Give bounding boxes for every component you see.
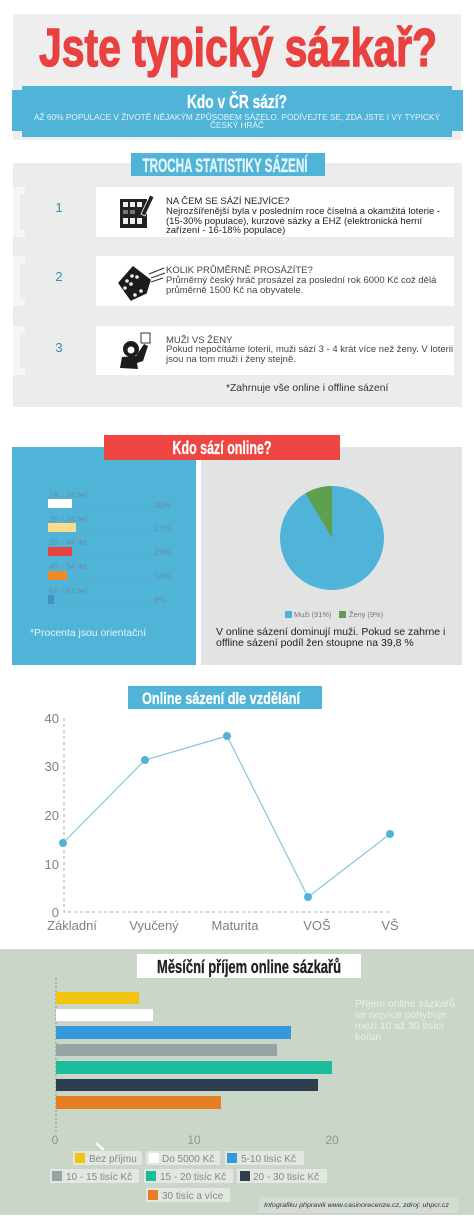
- line chart: VOŠ: [303, 918, 331, 933]
- bar chart: age: 18 - 24 let: [49, 490, 87, 500]
- legend: Muži (91%): [294, 610, 331, 619]
- note: *Procenta jsou orientační: [30, 628, 146, 639]
- legend: Bez příjmu: [89, 1154, 137, 1165]
- text block: offline sázení podíl žen stoupne na 39,8 %: [216, 637, 414, 649]
- bar chart: age: 18%: [154, 571, 171, 581]
- line chart: Základní: [47, 918, 97, 933]
- row 2: Průměrný český hráč prosázel za poslední rok 6000 Kč což dělá: [166, 275, 437, 286]
- text block: V online sázení dominují muži. Pokud se zahrne i: [216, 626, 445, 638]
- heading: education: [128, 686, 322, 709]
- bar chart: age: 55 - 64 let: [49, 586, 87, 596]
- bar chart: income: 0: [52, 1133, 59, 1147]
- row 2: průměrně 1500 Kč na obyvatele.: [166, 285, 303, 296]
- panel: statistics: [13, 153, 462, 407]
- heading: income: [137, 954, 361, 978]
- line chart: 40: [45, 711, 59, 726]
- bar chart: age: 25 - 34 let: [49, 514, 87, 524]
- row 3: [13, 326, 454, 375]
- panel: income: [0, 949, 474, 1215]
- bar chart: age: [48, 490, 171, 605]
- side note: Příjem online sázkařů: [355, 998, 455, 1010]
- line chart: 0: [52, 905, 59, 920]
- bar chart: age: 8%: [154, 595, 167, 605]
- legend: 10 - 15 tisíc Kč: [66, 1172, 132, 1183]
- legend: 5-10 tisíc Kč: [241, 1154, 296, 1165]
- line chart: Maturita: [212, 918, 259, 933]
- banner: AŽ 60% POPULACE V ŽIVOTĚ NĚJAKÝM ZPŮSOBEM SÁZELO. PODÍVEJTE SE, ZDA JSTE I VY TYPICKÝ: [34, 113, 441, 122]
- row 3: MUŽI VS ŽENY: [166, 335, 233, 346]
- icon: lottery ticket: [120, 195, 154, 228]
- legend: 15 - 20 tisíc Kč: [160, 1172, 226, 1183]
- line chart: [45, 711, 399, 933]
- icon: person with card: [120, 333, 150, 369]
- line chart: 30: [45, 759, 59, 774]
- legend: 20 - 30 tisíc Kč: [253, 1172, 319, 1183]
- line chart: 10: [45, 857, 59, 872]
- credit: [258, 1197, 458, 1213]
- row 2: KOLIK PRŮMĚRNĚ PROSÁZÍTE?: [166, 264, 313, 276]
- bar chart: age: 35 - 44 let: [49, 537, 87, 547]
- row 1: (15-30% populace), kurzové sázky a EHZ (elektronická herní: [166, 216, 422, 227]
- side note: mezi 10 až 30 tisíci: [355, 1021, 443, 1032]
- row 1: 1: [55, 200, 63, 215]
- banner: ČESKÝ HRÁČ: [210, 121, 264, 130]
- row 2: 2: [55, 269, 63, 284]
- panel: age groups: [12, 447, 196, 665]
- bar chart: income: [52, 978, 339, 1150]
- heading: who bets online: [104, 435, 340, 460]
- banner: [12, 86, 463, 137]
- bar chart: income: 20: [325, 1133, 339, 1147]
- icon: dice: [119, 267, 165, 300]
- legend: Ženy (9%): [349, 610, 383, 619]
- credit: Infografiku připravili www.casinorecenze.cz, zdroj: uhpcr.cz: [264, 1202, 450, 1209]
- footnote: *Zahrnuje vše online i offline sázení: [226, 383, 389, 394]
- bar chart: age: 45 - 54 let: [49, 561, 87, 571]
- legend: [285, 610, 383, 619]
- heading: statistics: TROCHA STATISTIKY SÁZENÍ: [142, 155, 308, 177]
- row 1: zařízení - 16-18% populace): [166, 225, 285, 236]
- side note: se nejvíce pohybuje: [355, 1010, 447, 1021]
- line chart: Vyučený: [129, 918, 179, 933]
- panel: header: [12, 14, 463, 140]
- row 3: 3: [55, 340, 63, 355]
- legend: Do 5000 Kč: [162, 1154, 214, 1165]
- row 3: jsou na tom muži i ženy stejně.: [165, 354, 296, 365]
- line chart: 20: [45, 808, 59, 823]
- row 1: Nejrozšířenější byla v posledním roce číselná a okamžitá loterie -: [166, 206, 440, 217]
- row 1: [13, 187, 454, 237]
- heading: income: Měsíční příjem online sázkařů: [157, 957, 341, 977]
- bar chart: age: 20%: [154, 500, 171, 510]
- row 3: Pokud nepočítáme loterii, muži sází 3 - 4 krát více než ženy. V loterii: [166, 344, 453, 355]
- banner: Kdo v ČR sází?: [187, 91, 287, 112]
- panel: gender: [201, 447, 462, 665]
- row 2: [13, 256, 454, 306]
- side note: korun: [355, 1032, 381, 1043]
- bar chart: age: 23%: [154, 547, 171, 557]
- row 1: NA ČEM SE SÁZÍ NEJVÍCE?: [166, 196, 290, 207]
- bar chart: income: 10: [187, 1133, 201, 1147]
- bar chart: age: 21%: [154, 523, 171, 533]
- legend: 30 tisíc a více: [162, 1191, 224, 1202]
- legend: [50, 1151, 327, 1202]
- heading: statistics: [131, 153, 325, 177]
- heading: who bets online: Kdo sází online?: [172, 438, 272, 458]
- line chart: VŠ: [381, 918, 399, 933]
- pie chart: [280, 486, 384, 590]
- heading: education: Online sázení dle vzdělání: [142, 689, 301, 708]
